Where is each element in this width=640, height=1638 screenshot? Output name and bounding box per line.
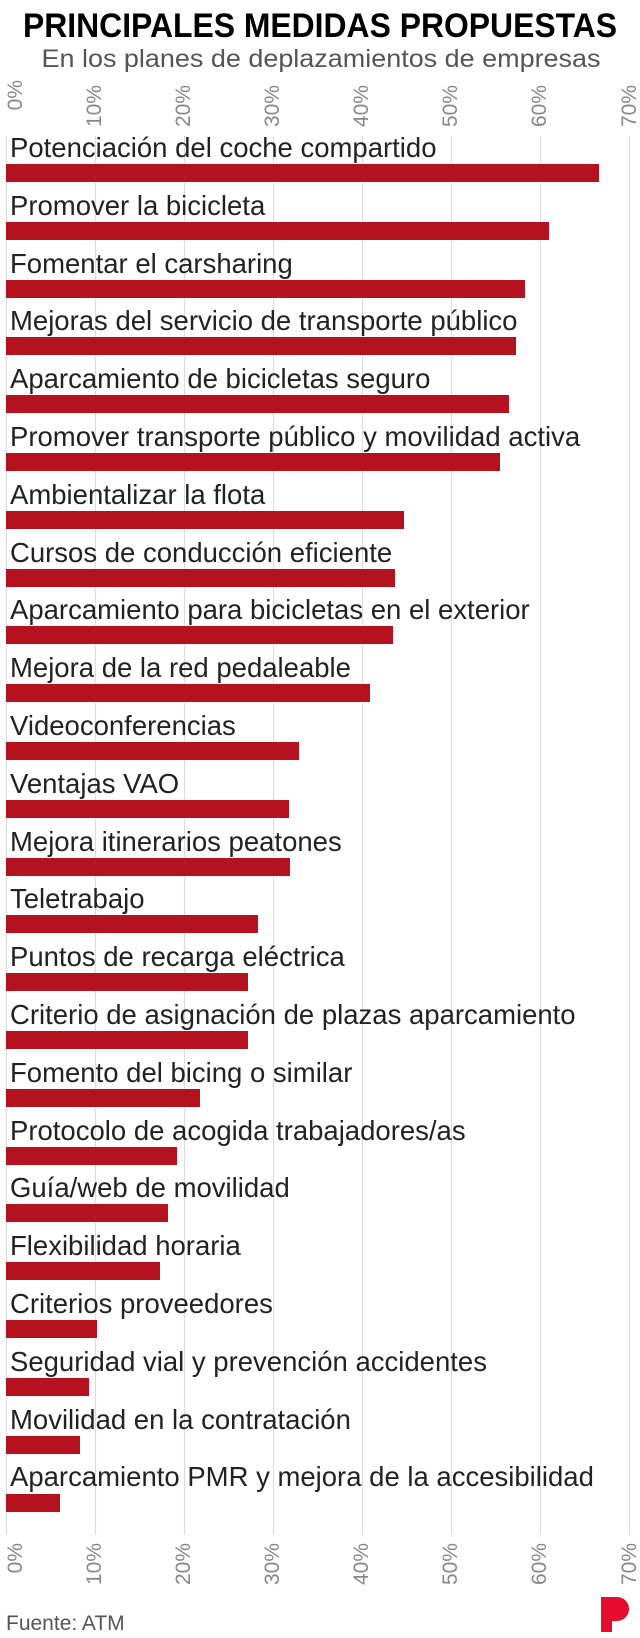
- bottom axis labels: 20%: [172, 1543, 195, 1585]
- bar chart: Teletrabajo: [10, 883, 145, 914]
- icon: logo P: [601, 1597, 629, 1632]
- bar chart: Mejora itinerarios peatones: [10, 826, 342, 857]
- title: PRINCIPALES MEDIDAS PROPUESTAS: [23, 7, 617, 45]
- top axis labels: 50%: [439, 85, 462, 127]
- bar chart: Mejora de la red pedaleable: [10, 652, 351, 683]
- bar chart: Flexibilidad horaria: [10, 1230, 242, 1261]
- bar chart: Protocolo de acogida trabajadores/as: [10, 1115, 466, 1146]
- bar chart: [6, 132, 599, 1512]
- top axis labels: 40%: [350, 85, 373, 127]
- bar chart: Aparcamiento para bicicletas en el exterior: [10, 594, 530, 625]
- bar chart: Criterio de asignación de plazas aparcamiento: [10, 999, 576, 1030]
- bar chart: Criterios proveedores: [10, 1288, 273, 1319]
- bar chart: Guía/web de movilidad: [10, 1172, 290, 1203]
- bar chart: Promover la bicicleta: [10, 190, 266, 221]
- bottom axis labels: 50%: [439, 1543, 462, 1585]
- bottom axis labels: 40%: [350, 1543, 373, 1585]
- bottom axis labels: 0%: [4, 1543, 27, 1573]
- bar chart: Promover transporte público y movilidad activa: [10, 421, 581, 452]
- top axis labels: 10%: [83, 85, 106, 127]
- bar chart: Potenciación del coche compartido: [10, 132, 437, 163]
- top axis labels: 20%: [172, 85, 195, 127]
- bottom axis labels: 10%: [83, 1543, 106, 1585]
- bottom axis labels: [4, 1543, 640, 1585]
- top axis labels: 0%: [4, 80, 27, 110]
- bar chart: Fomento del bicing o similar: [10, 1057, 352, 1088]
- bar chart: Movilidad en la contratación: [10, 1404, 351, 1435]
- top axis labels: 30%: [261, 85, 284, 127]
- subtitle: En los planes de deplazamientos de empresas: [42, 45, 600, 73]
- bottom axis labels: 30%: [261, 1543, 284, 1585]
- top axis labels: 60%: [528, 85, 551, 127]
- source: Fuente: ATM: [6, 1612, 125, 1635]
- bar chart: Seguridad vial y prevención accidentes: [10, 1346, 487, 1377]
- bar chart: Ambientalizar la flota: [10, 479, 266, 510]
- bar chart: Aparcamiento PMR y mejora de la accesibilidad: [10, 1461, 594, 1492]
- top axis labels: [4, 80, 640, 127]
- bar chart: Ventajas VAO: [10, 768, 179, 799]
- bar chart: Mejoras del servicio de transporte público: [10, 305, 517, 336]
- bar chart: Cursos de conducción eficiente: [10, 537, 392, 568]
- bar chart: Puntos de recarga eléctrica: [10, 941, 345, 972]
- bar chart: Fomentar el carsharing: [10, 248, 293, 279]
- bar chart: Aparcamiento de bicicletas seguro: [10, 363, 430, 394]
- bar chart: Videoconferencias: [10, 710, 236, 741]
- bottom axis labels: 60%: [528, 1543, 551, 1585]
